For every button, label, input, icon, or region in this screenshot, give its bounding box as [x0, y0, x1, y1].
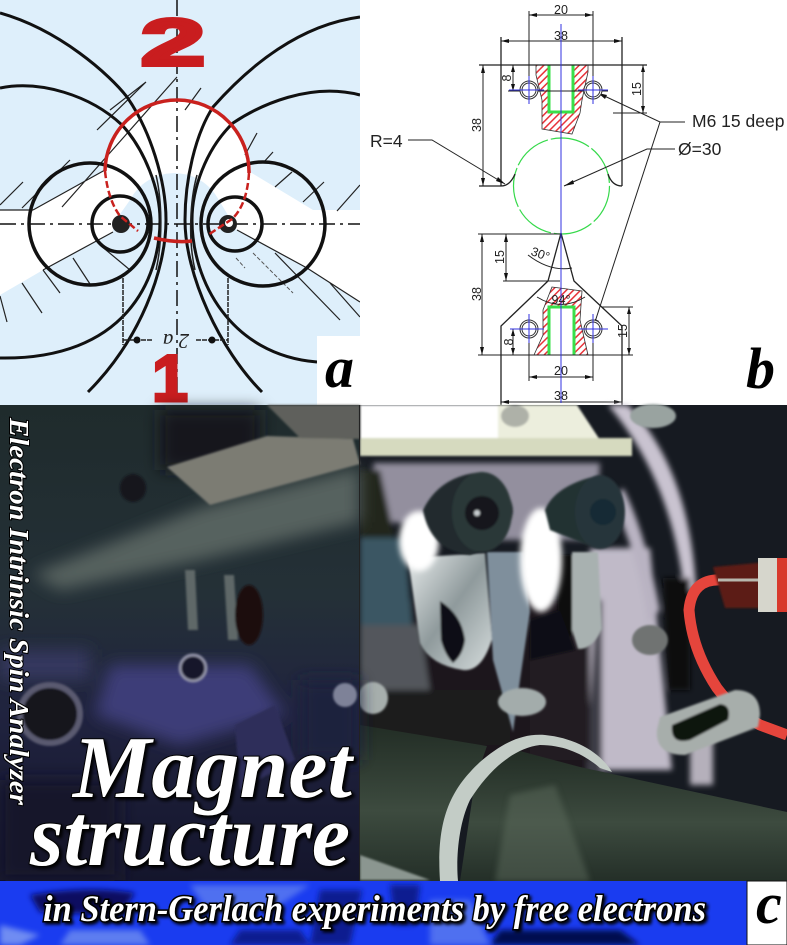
- studs: [354, 625, 668, 858]
- dimension values: 38: [554, 29, 568, 43]
- leader label M6 15 deep: M6 15 deep: [692, 111, 784, 131]
- red circle: [105, 100, 249, 173]
- top slot: [549, 65, 573, 112]
- dimension values: 94°: [552, 293, 570, 307]
- dimension values: 30°: [529, 244, 552, 264]
- numeral 1: 1: [152, 341, 188, 415]
- top magnet part hatching: [536, 65, 588, 134]
- red wire: [689, 558, 787, 735]
- label c: [747, 871, 787, 945]
- panel b: technical drawing: [360, 0, 787, 405]
- leader label R=4: R=4: [370, 131, 403, 151]
- leader label diameter: Ø=30: [678, 139, 722, 159]
- bottom slot: [549, 307, 574, 355]
- field lines: [0, 13, 360, 392]
- white pole pieces: [0, 99, 360, 302]
- mounting holes: [112, 215, 130, 233]
- centre axes: [0, 0, 360, 405]
- hot spots: [399, 508, 562, 612]
- pole circles: [29, 162, 325, 286]
- dimension values: 15: [493, 250, 507, 264]
- chrome clips: [408, 552, 602, 732]
- title: structure: structure: [29, 788, 350, 885]
- numeral 2: 2: [141, 5, 205, 79]
- dimension values: 8: [500, 74, 514, 81]
- dimension values: 8: [502, 338, 516, 345]
- label c: c: [756, 871, 782, 936]
- label a: [317, 335, 360, 405]
- dimension values: 38: [470, 287, 484, 301]
- bolt holes: [520, 81, 602, 338]
- hatching: [0, 77, 360, 322]
- dimension values: 20: [554, 364, 568, 378]
- dimension 2a: [123, 278, 228, 345]
- oval ring: [657, 690, 760, 755]
- panel c: tinted photograph, left side: [0, 405, 360, 881]
- centre lines: [509, 24, 608, 403]
- title: Magnet: Magnet: [71, 720, 355, 817]
- banner text: in Stern-Gerlach experiments by free electrons: [43, 889, 706, 930]
- panel a: field line diagram: [0, 0, 360, 415]
- tube: [360, 725, 787, 881]
- panel c: divider between tinted and clear photo: [359, 405, 360, 881]
- bottom banner: [0, 881, 747, 945]
- dimension values: 20: [554, 3, 568, 17]
- dimension values: 15: [616, 324, 630, 338]
- outlines and dimension lines: [408, 11, 685, 405]
- dimension values: 38: [554, 389, 568, 403]
- gap circle: [514, 138, 610, 234]
- panel c: photograph, right side: [354, 404, 787, 881]
- cream top strip: [360, 404, 676, 456]
- dimension values: [470, 3, 644, 403]
- arrowheads: [480, 13, 645, 404]
- dimension values: 15: [630, 82, 644, 96]
- dimension values: 38: [470, 118, 484, 132]
- bottom magnet part hatching: [534, 287, 588, 355]
- panel a: field line diagram: 2 a: [163, 329, 189, 353]
- label b: b: [746, 336, 775, 401]
- vertical subtitle: Electron Intrinsic Spin Analyzer: [4, 417, 34, 806]
- label a: a: [325, 335, 354, 400]
- socket screws: [423, 472, 625, 555]
